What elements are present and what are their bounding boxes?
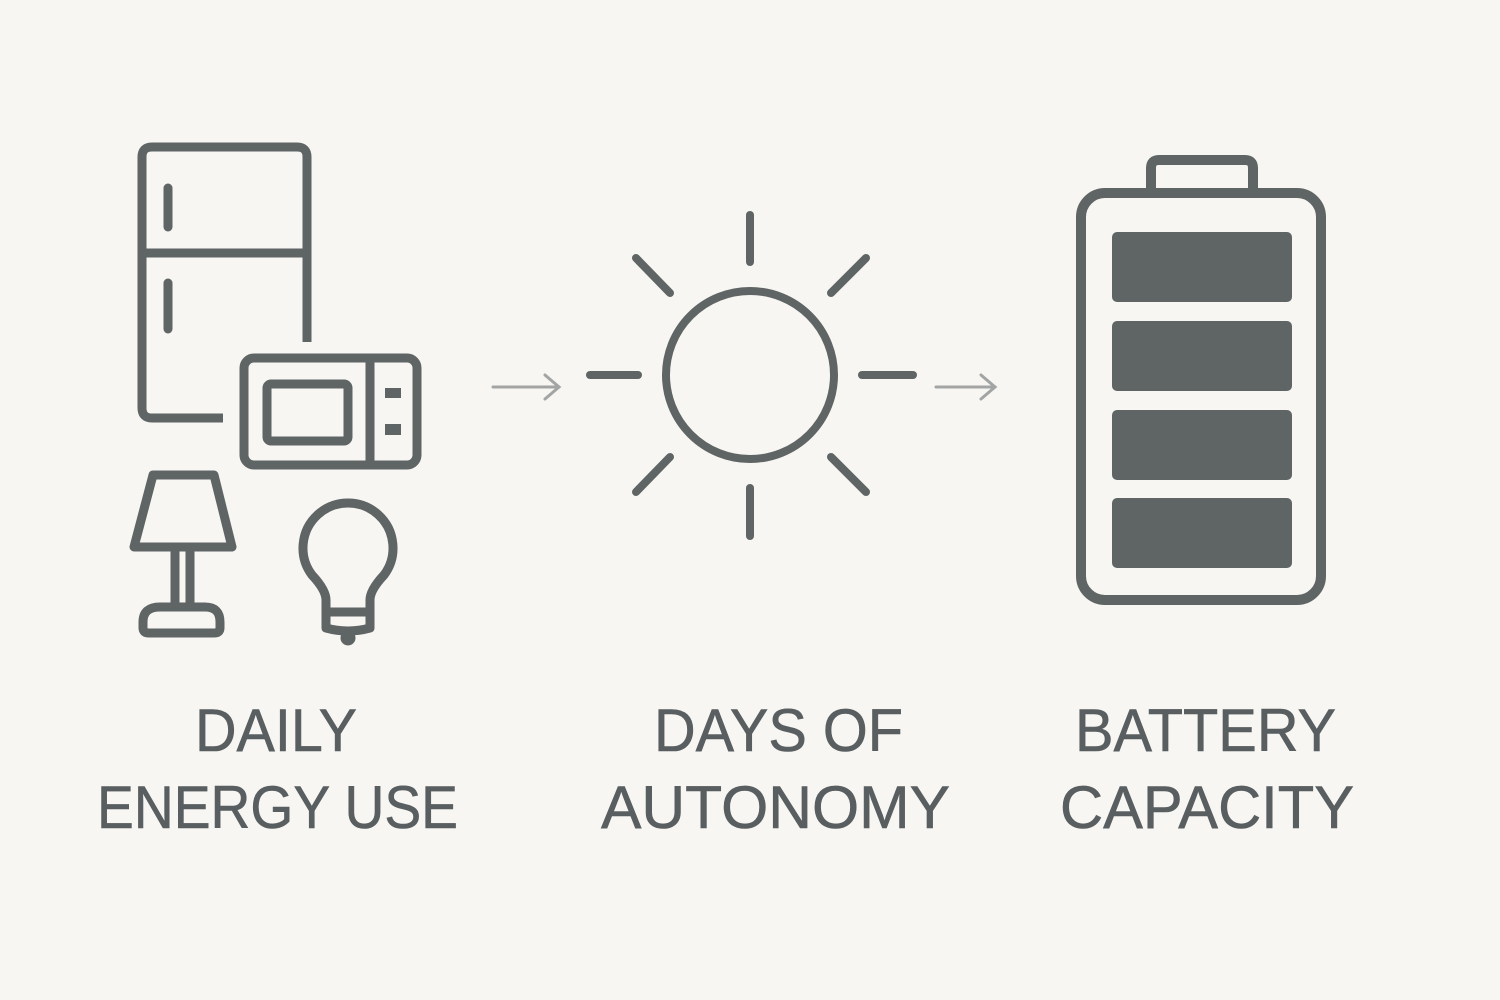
icon: sun: [590, 215, 913, 536]
label: daily energy use: DAILY: [195, 697, 357, 764]
arrow 1: [493, 375, 559, 399]
label: days of autonomy: [601, 697, 950, 841]
label: daily energy use: ENERGY USE: [97, 774, 458, 841]
icon: microwave: [244, 358, 417, 465]
label: battery capacity: [1060, 697, 1354, 841]
label: battery capacity: BATTERY: [1075, 697, 1336, 764]
label: battery capacity: CAPACITY: [1060, 774, 1354, 841]
label: daily energy use: [97, 697, 458, 841]
icon: appliances: [134, 147, 417, 641]
icon: lamp: [134, 475, 232, 633]
label: days of autonomy: AUTONOMY: [601, 774, 950, 841]
icon: refrigerator: [142, 147, 307, 418]
icon: light bulb: [303, 503, 393, 641]
icon: battery: [1081, 160, 1321, 600]
arrow 2: [936, 375, 995, 399]
label: days of autonomy: DAYS OF: [654, 697, 903, 764]
